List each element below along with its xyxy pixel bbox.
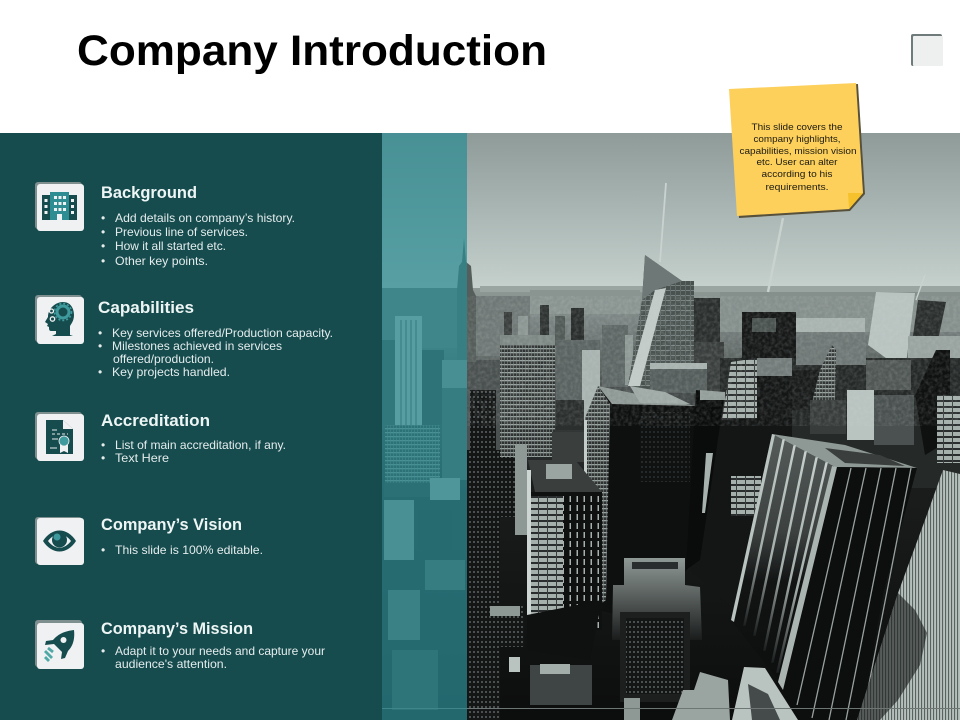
bullet list: Milestones achieved in services: [112, 339, 282, 353]
bullet list: •: [98, 326, 102, 340]
bullet list: •: [101, 438, 105, 452]
note paper: [729, 83, 863, 216]
bullet list: offered/production.: [113, 352, 214, 366]
bullet list: [98, 326, 333, 379]
bullet list: •: [101, 543, 105, 557]
note text: company highlights,: [754, 133, 840, 144]
street block of small towers: [467, 390, 588, 720]
central black tower: [712, 357, 792, 516]
panel: left dark teal: [0, 133, 382, 720]
bullet list: Key services offered/Production capacity.: [112, 326, 333, 340]
note text: This slide covers the: [752, 121, 842, 132]
heading: Accreditation: [101, 412, 210, 430]
Empire State tower: [457, 238, 476, 362]
bullet list: Other key points.: [115, 254, 208, 268]
bullet list: audience's attention.: [115, 657, 227, 671]
note text: according to his: [762, 168, 833, 179]
large dark tower with light left face: [584, 386, 725, 620]
bullet list: List of main accreditation, if any.: [115, 438, 286, 452]
tower under construction: [742, 312, 796, 358]
far right towers: [868, 292, 960, 358]
note text: [740, 121, 856, 192]
heading: Company’s Mission: [101, 620, 253, 638]
city photograph: [382, 133, 960, 720]
item: Capabilities: [35, 295, 333, 379]
bullet list: [101, 211, 295, 268]
heading: Capabilities: [98, 299, 194, 317]
bullet list: How it all started etc.: [115, 239, 226, 253]
bullet list: •: [101, 225, 105, 239]
photographic grain on mid-distance skyline: [467, 296, 960, 426]
note text: requirements.: [766, 181, 828, 192]
item: Accreditation: [35, 412, 286, 465]
note text: capabilities, mission vision: [740, 145, 856, 156]
grid office tower: [500, 335, 555, 457]
right shadowed mass: [720, 335, 960, 488]
wedge glass tower: [628, 255, 694, 386]
bullet list: •: [98, 339, 102, 353]
title: Company Introduction: [77, 27, 547, 75]
heading: Background: [101, 184, 197, 202]
tall glazed tower with dark stripes: [731, 434, 917, 720]
foreground rooftops: [382, 657, 960, 720]
bullet list: Key projects handled.: [112, 365, 230, 379]
bullet list: Text Here: [115, 451, 169, 465]
icon: rocket: [35, 620, 84, 669]
teal translucent band over photo: [382, 133, 467, 720]
radio antennas: [660, 183, 925, 300]
bullet list: •: [101, 211, 105, 225]
bullet list: Previous line of services.: [115, 225, 248, 239]
item: Company's Vision: [35, 516, 263, 565]
icon: head with gears: [35, 295, 84, 344]
bullet list: •: [101, 239, 105, 253]
icon: certificate document: [35, 412, 84, 461]
bullet list: •: [101, 254, 105, 268]
heading: Company’s Vision: [101, 516, 242, 534]
note text: etc. User can alter: [756, 156, 838, 167]
striped white skyscraper at right edge: [857, 470, 960, 720]
icon: office buildings: [35, 182, 84, 231]
item: Company's Mission: [35, 620, 325, 671]
item: Background: [35, 182, 295, 268]
bullet list: •: [98, 365, 102, 379]
bullet list: This slide is 100% editable.: [115, 543, 263, 557]
bullet list: [101, 644, 325, 671]
distant water and skyline: [382, 286, 960, 450]
note shadow: [732, 84, 865, 218]
bullet list: •: [101, 644, 105, 658]
lower centre building: [612, 558, 702, 702]
dark towers behind: [650, 298, 724, 402]
patterned facade tower: [515, 445, 602, 628]
sticky note: [729, 83, 865, 218]
bullet list: Add details on company’s history.: [115, 211, 295, 225]
note fold: [848, 193, 863, 209]
logo placeholder square: [911, 34, 943, 66]
icon: eye: [35, 517, 84, 565]
bullet list: Adapt it to your needs and capture your: [115, 644, 325, 658]
bullet list: •: [101, 451, 105, 465]
bullet list: [101, 438, 286, 465]
left midtown towers under tint: [382, 316, 467, 710]
